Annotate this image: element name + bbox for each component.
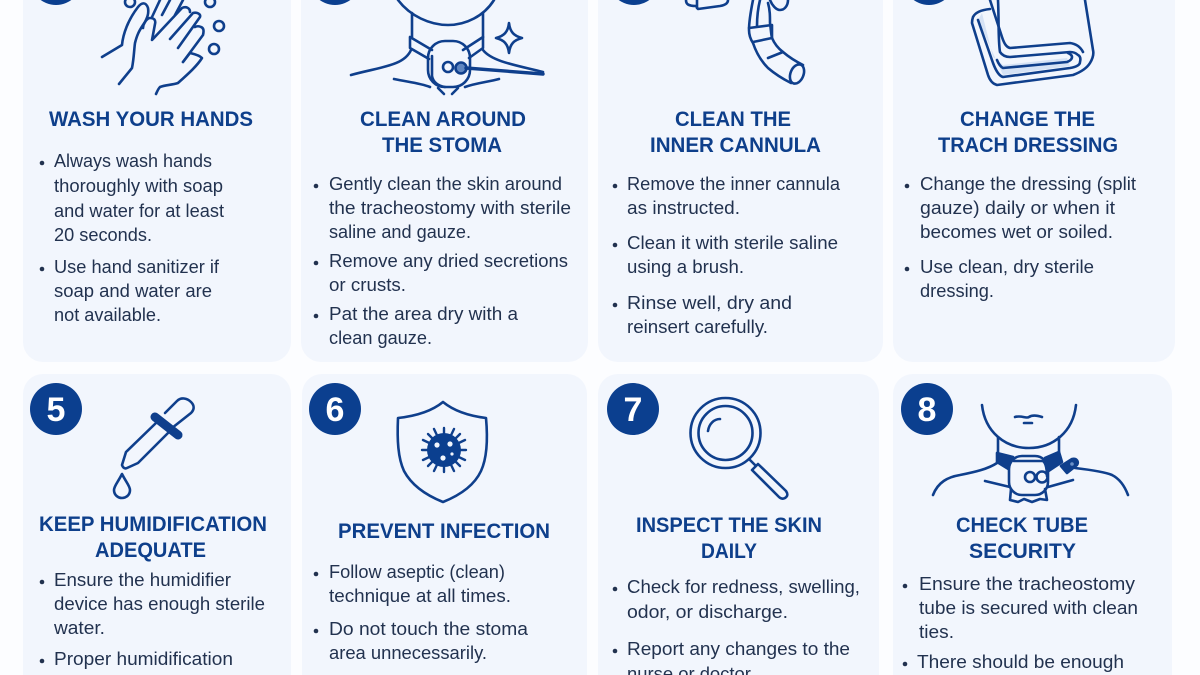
- icon: inner cannula: [686, 0, 807, 86]
- bullet list: 20 seconds.: [54, 225, 152, 245]
- bullet list: [613, 174, 841, 337]
- bullet list: [903, 574, 1138, 672]
- heading: [938, 108, 1118, 157]
- panel: step 6 prevent infection: [302, 374, 587, 675]
- bullet list: Use hand sanitizer if: [54, 257, 220, 277]
- panel: step 5 keep humidification adequate: [23, 374, 291, 675]
- bullet list: Do not touch the stoma: [329, 619, 529, 639]
- bullet list: [314, 174, 571, 348]
- bullet list: Use clean, dry sterile: [920, 257, 1094, 277]
- heading: WASH YOUR HANDS: [49, 108, 253, 131]
- badge 8: [901, 383, 953, 435]
- heading: DAILY: [701, 540, 757, 563]
- heading: ADEQUATE: [95, 539, 206, 562]
- bullet list: [905, 174, 1136, 301]
- heading: PREVENT INFECTION: [338, 520, 550, 543]
- heading: SECURITY: [969, 540, 1076, 563]
- heading: CLEAN THE: [675, 108, 791, 131]
- bullet list: and water for at least: [54, 201, 224, 221]
- heading: KEEP HUMIDIFICATION: [39, 513, 267, 536]
- heading: THE STOMA: [382, 134, 502, 157]
- icon: neck with secured tube: [933, 405, 1128, 502]
- heading: INNER CANNULA: [650, 134, 821, 157]
- heading: [360, 108, 526, 157]
- bullet list: soap and water are: [54, 281, 212, 301]
- bullet list: [613, 577, 860, 675]
- bullet list: [314, 562, 529, 663]
- heading: [956, 514, 1088, 563]
- bullet list: Ensure the tracheostomy: [919, 574, 1135, 594]
- bullet list: not available.: [54, 305, 161, 325]
- badge 6: [309, 383, 361, 435]
- bullet list: as instructed.: [627, 198, 740, 218]
- bullet list: gauze) daily or when it: [920, 198, 1115, 218]
- bullet list: thoroughly with soap: [54, 176, 223, 196]
- bullet list: Report any changes to the: [627, 639, 850, 659]
- icon: washing hands: [102, 0, 224, 94]
- panel: step 3 clean the inner cannula: [598, 0, 883, 362]
- badge 6: 6: [326, 391, 344, 429]
- bullet list: Proper humidification: [54, 649, 233, 669]
- panel: step 8 check tube security: [893, 374, 1172, 675]
- bullet list: [40, 151, 224, 325]
- bullet list: water.: [53, 618, 105, 638]
- badge 7: [607, 383, 659, 435]
- bullet list: reinsert carefully.: [627, 317, 768, 337]
- bullet list: Check for redness, swelling,: [627, 577, 860, 597]
- heading: CHANGE THE: [960, 108, 1095, 131]
- bullet list: technique at all times.: [329, 586, 511, 606]
- badge 1: [30, 0, 82, 5]
- heading: TRACH DRESSING: [938, 134, 1118, 157]
- bullet list: There should be enough: [917, 652, 1124, 672]
- bullet list: clean gauze.: [329, 328, 432, 348]
- panel: step 7 inspect the skin daily: [598, 374, 879, 675]
- bullet list: Rinse well, dry and: [627, 293, 792, 313]
- icon: shield with virus: [398, 402, 487, 502]
- heading: INSPECT THE SKIN: [636, 514, 822, 537]
- badge 5: [30, 383, 82, 435]
- panel: step 4 change the trach dressing: [893, 0, 1175, 362]
- bullet list: Remove any dried secretions: [329, 251, 568, 271]
- bullet list: or crusts.: [329, 275, 406, 295]
- icon: neck with stoma: [351, 0, 543, 94]
- badge 7: 7: [624, 391, 642, 429]
- bullet list: Follow aseptic (clean): [329, 562, 505, 582]
- badge 3: [608, 0, 660, 5]
- heading: [636, 514, 822, 563]
- bullet list: Ensure the humidifier: [54, 570, 231, 590]
- bullet list: device has enough sterile: [54, 594, 265, 614]
- bullet list: Change the dressing (split: [920, 174, 1136, 194]
- bullet list: dressing.: [920, 281, 994, 301]
- heading: [39, 513, 267, 562]
- bullet list: [40, 570, 265, 669]
- bullet list: saline and gauze.: [329, 222, 471, 242]
- panel: step 1 wash your hands: [23, 0, 291, 362]
- badge 4: [903, 0, 955, 5]
- bullet list: ties.: [919, 622, 954, 642]
- bullet list: Always wash hands: [54, 151, 212, 171]
- bullet list: becomes wet or soiled.: [920, 222, 1113, 242]
- heading: CLEAN AROUND: [360, 108, 526, 131]
- badge 8: 8: [918, 391, 936, 429]
- badge 5: 5: [47, 391, 65, 429]
- bullet list: Remove the inner cannula: [627, 174, 841, 194]
- heading: CHECK TUBE: [956, 514, 1088, 537]
- bullet list: Gently clean the skin around: [329, 174, 562, 194]
- badge 2: [309, 0, 361, 5]
- heading: [650, 108, 821, 157]
- icon: folded gauze dressing: [972, 0, 1093, 85]
- panel: step 2 clean around the stoma: [301, 0, 588, 362]
- icon: magnifying glass: [690, 398, 787, 499]
- bullet list: the tracheostomy with sterile: [329, 198, 571, 218]
- bullet list: using a brush.: [627, 257, 744, 277]
- bullet list: odor, or discharge.: [627, 602, 788, 622]
- bullet list: tube is secured with clean: [919, 598, 1138, 618]
- bullet list: Clean it with sterile saline: [627, 233, 838, 253]
- icon: dropper: [114, 398, 194, 498]
- bullet list: Pat the area dry with a: [329, 304, 519, 324]
- bullet list: area unnecessarily.: [329, 643, 487, 663]
